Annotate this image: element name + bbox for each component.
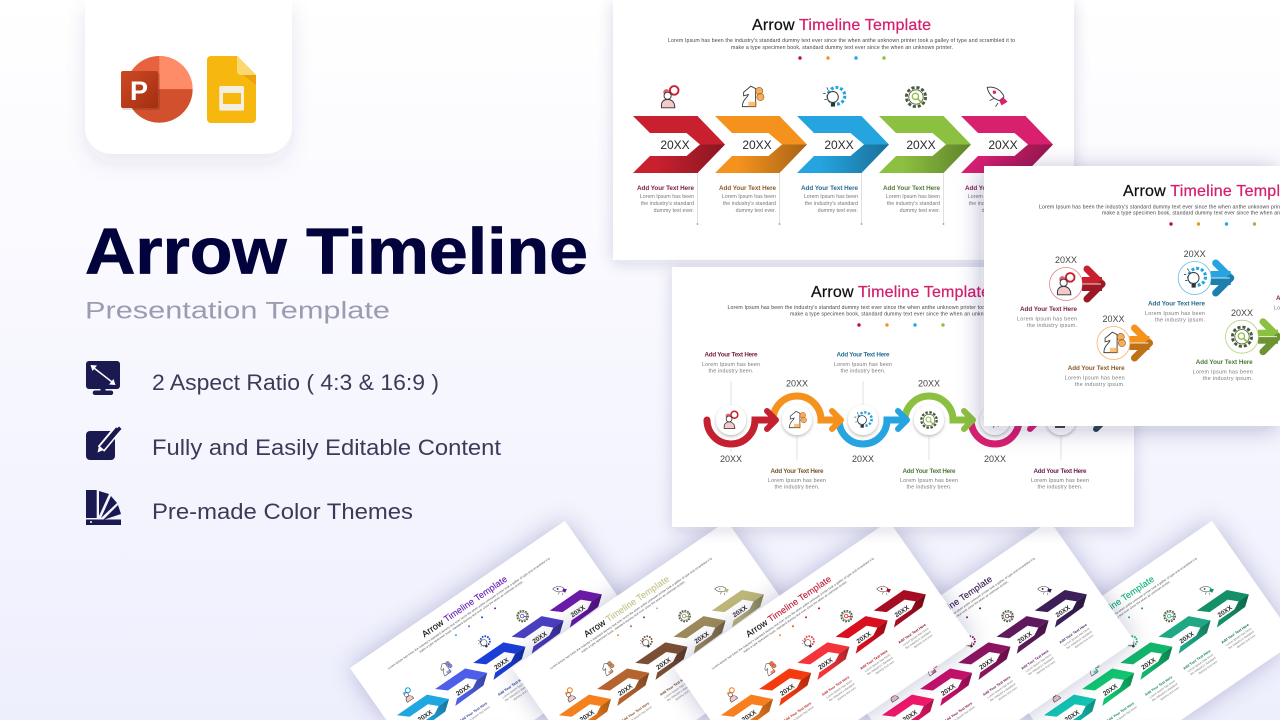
step 3: Add Your Text Here bbox=[801, 185, 858, 192]
step 2: 20XX bbox=[455, 683, 473, 698]
slide: arrow circles bbox=[984, 166, 1280, 426]
step 2: the industry's standard bbox=[723, 201, 776, 207]
step 4 bbox=[502, 594, 569, 658]
slide: earth theme: Lorem Ipsum has been the industry's standard dummy text ever since the when anthe unknown printer took a galley of type and scrambled it to bbox=[549, 556, 713, 670]
step 2 bbox=[910, 646, 990, 720]
step 3: dummy text ever. bbox=[818, 208, 858, 214]
step 3 bbox=[1111, 620, 1195, 708]
step 5: 20XX bbox=[570, 604, 587, 619]
step 1 bbox=[711, 672, 778, 720]
step 3: 20XX bbox=[1184, 249, 1206, 259]
step 3: the industry ipsum. bbox=[1155, 318, 1205, 324]
step 2 bbox=[587, 646, 667, 720]
step 4: Lorem Ipsum has been bbox=[900, 478, 958, 484]
step 3: Add Your Text Here bbox=[836, 352, 890, 358]
step 3: 20XX bbox=[1140, 656, 1158, 672]
step 3: Lorem Ipsum has been bbox=[825, 679, 853, 699]
slide: magenta theme: Arrow Timeline Template bbox=[905, 574, 994, 639]
slide: green theme bbox=[997, 521, 1280, 720]
slide intro text bbox=[1039, 204, 1280, 216]
step 4: Lorem Ipsum has been bbox=[1187, 653, 1214, 673]
step 4 bbox=[879, 87, 971, 225]
step 3 bbox=[626, 620, 710, 708]
slide: purple theme: Arrow Timeline Template bbox=[420, 574, 509, 639]
step 4: dummy text ever. bbox=[1198, 659, 1219, 675]
step 1: the industry ipsum. bbox=[1027, 323, 1077, 329]
step 4: 20XX bbox=[1016, 630, 1034, 645]
step 4 bbox=[900, 378, 973, 490]
step 4: the industry's standard bbox=[866, 656, 894, 676]
step 5 bbox=[1187, 568, 1271, 656]
step 2 bbox=[1065, 314, 1150, 388]
step 4: the industry been. bbox=[906, 484, 952, 490]
step 4: 20XX bbox=[693, 630, 711, 645]
slide: purple theme bbox=[350, 521, 649, 720]
step 1: Lorem Ipsum has been bbox=[640, 194, 694, 200]
step 1: Add Your Text Here bbox=[704, 352, 758, 358]
step 2 bbox=[715, 86, 807, 225]
step 5: Lorem Ipsum has been bbox=[1225, 626, 1253, 647]
step 5 bbox=[864, 568, 948, 656]
step 5: Add Your Text Here bbox=[1059, 623, 1088, 645]
step 4: Lorem Ipsum has been bbox=[864, 653, 891, 673]
title: Arrow Timeline bbox=[85, 214, 588, 288]
step 3: Lorem Ipsum has been bbox=[663, 679, 691, 699]
icon: color fan bbox=[86, 490, 121, 525]
step 5: 20XX bbox=[988, 138, 1018, 152]
step 2: 20XX bbox=[1102, 683, 1120, 698]
step 2: 20XX bbox=[617, 683, 635, 698]
step 1: 20XX bbox=[660, 138, 690, 152]
slide: red theme: Lorem Ipsum has been the industry's standard dummy text ever since the when anthe unknown printer took a galley of type and scrambled it to bbox=[711, 556, 875, 670]
step 3: the industry's standard bbox=[666, 682, 693, 702]
slide: earth theme: Arrow Timeline Template bbox=[582, 574, 671, 639]
step 6: Lorem Ipsum has been bbox=[1031, 478, 1089, 484]
text: themes: Pre-made Color Themes bbox=[152, 499, 413, 524]
step 5: dummy text ever. bbox=[982, 208, 1022, 214]
step 3: the industry's standard bbox=[1151, 682, 1178, 702]
step 3: dummy text ever. bbox=[512, 685, 534, 701]
step 3: Lorem Ipsum has been bbox=[834, 362, 892, 368]
step 1 bbox=[633, 86, 725, 225]
step 5: the industry's standard bbox=[969, 201, 1022, 207]
step 2: 20XX bbox=[940, 683, 958, 698]
step 1: the industry been. bbox=[708, 368, 754, 374]
slide intro text: Lorem Ipsum has been the industry's standard dummy text ever since the when anthe unknown printer took a galley of type and scrambled it to bbox=[668, 38, 1015, 44]
step 3: the industry's standard bbox=[828, 682, 855, 702]
step 3: Lorem Ipsum has been bbox=[804, 194, 858, 200]
step 2 bbox=[425, 646, 505, 720]
step 2: dummy text ever. bbox=[736, 208, 776, 214]
step 3 bbox=[949, 620, 1033, 708]
step 3: the industry been. bbox=[840, 368, 886, 374]
step 3: 20XX bbox=[978, 656, 996, 672]
step 5: Add Your Text Here bbox=[898, 623, 927, 645]
step 2: Add Your Text Here bbox=[1068, 365, 1125, 372]
step 4: the industry ipsum. bbox=[1203, 376, 1253, 382]
slide: magenta theme bbox=[835, 521, 1134, 720]
step 6: Add Your Text Here bbox=[1034, 468, 1087, 475]
step 2: Add Your Text Here bbox=[719, 185, 776, 192]
step 5 bbox=[971, 405, 1039, 464]
step 3: the industry's standard bbox=[805, 201, 858, 207]
step 4: Lorem Ipsum has been bbox=[1025, 653, 1052, 673]
step 5: dummy text ever. bbox=[913, 633, 934, 649]
slide intro text: Lorem Ipsum has been the industry's standard dummy text ever since the when anthe unknown printer took a galley of type and scrambled it to bbox=[728, 305, 1075, 311]
step 4: 20XX bbox=[1178, 630, 1196, 645]
step 4: 20XX bbox=[918, 378, 940, 388]
step 3 bbox=[788, 620, 872, 708]
step 4: dummy text ever. bbox=[1036, 659, 1057, 675]
step 2: 20XX bbox=[786, 378, 808, 388]
step 3: Add Your Text Here bbox=[1148, 300, 1205, 308]
step 4: Lorem Ipsum has been bbox=[886, 194, 940, 200]
slide: purple theme: Lorem Ipsum has been the industry's standard dummy text ever since the when anthe unknown printer took a galley of type and scrambled it to bbox=[387, 556, 551, 670]
step 1 bbox=[872, 672, 939, 720]
step 5 bbox=[540, 568, 607, 631]
step 5: the industry's standard bbox=[905, 630, 932, 650]
slide: green theme: Lorem Ipsum has been the industry's standard dummy text ever since the when anthe unknown printer took a galley of type and scrambled it to bbox=[1034, 556, 1198, 670]
slide: serpentine arrows bbox=[672, 267, 1134, 527]
step 5: 20XX bbox=[984, 454, 1006, 464]
step 2: Lorem Ipsum has been bbox=[1065, 376, 1125, 382]
step 3: dummy text ever. bbox=[997, 685, 1019, 701]
step 3: 20XX bbox=[493, 656, 511, 672]
step 2: Lorem Ipsum has been bbox=[768, 478, 826, 484]
step 1: Add Your Text Here bbox=[637, 185, 694, 192]
slide: purple theme: make a type specimen book, standard dummy text ever since the when an unknown printer. bbox=[418, 579, 524, 654]
step 4: the industry's standard bbox=[1189, 656, 1217, 676]
slide intro text: make a type specimen book, standard dummy text ever since the when an unknown printer. bbox=[790, 312, 1012, 318]
slide heading: Arrow Timeline Template bbox=[752, 17, 931, 34]
slide intro text: make a type specimen book, standard dummy text ever since the when an unknown printer. bbox=[731, 45, 953, 51]
step 4: Add Your Text Here bbox=[1020, 649, 1050, 671]
slide: magenta theme: Lorem Ipsum has been the industry's standard dummy text ever since the when anthe unknown printer took a galley of type and scrambled it to bbox=[872, 556, 1036, 670]
step 2: 20XX bbox=[779, 683, 797, 698]
step 6: the industry been. bbox=[1038, 484, 1082, 490]
step 6 bbox=[1031, 396, 1105, 490]
step 4: dummy text ever. bbox=[900, 208, 940, 214]
step 1: Add Your Text Here bbox=[1020, 306, 1077, 313]
step 1: Lorem Ipsum has been bbox=[702, 362, 760, 368]
step 3: Lorem Ipsum has been bbox=[986, 679, 1014, 699]
step 5: 20XX bbox=[1217, 604, 1234, 619]
step 2: the industry ipsum. bbox=[1075, 382, 1125, 388]
step 3: the industry's standard bbox=[989, 682, 1016, 702]
step 4: Add Your Text Here bbox=[859, 649, 889, 671]
step 2: Add Your Text Here bbox=[770, 468, 824, 475]
step 5: 20XX bbox=[894, 604, 911, 619]
step 4 bbox=[826, 594, 910, 682]
step 3: 20XX bbox=[852, 454, 874, 464]
step 5 bbox=[702, 568, 769, 631]
step 1: 20XX bbox=[720, 454, 742, 464]
step 4: 20XX bbox=[1231, 308, 1253, 318]
step 4: 20XX bbox=[855, 630, 873, 645]
step 5 bbox=[961, 87, 1053, 214]
step 1: Lorem Ipsum has been bbox=[1017, 316, 1077, 322]
step 4: dummy text ever. bbox=[875, 659, 896, 675]
step 3: 20XX bbox=[824, 138, 854, 152]
step 5: Lo bbox=[1274, 306, 1280, 312]
step 3: Lorem Ipsum has been bbox=[1148, 679, 1176, 699]
feature: aspect ratio bbox=[86, 361, 439, 395]
feature: editable bbox=[86, 428, 501, 460]
step 3: dummy text ever. bbox=[836, 685, 858, 701]
step 5 bbox=[1025, 568, 1109, 656]
slide intro text bbox=[728, 305, 1075, 318]
text: editable: Fully and Easily Editable Content bbox=[152, 435, 501, 460]
legend dots bbox=[1169, 222, 1256, 226]
step 3: dummy text ever. bbox=[1159, 685, 1181, 701]
step 2 bbox=[768, 378, 841, 490]
slide: earth theme bbox=[512, 521, 811, 720]
step 3: Add Your Text Here bbox=[821, 675, 850, 697]
step 1 bbox=[549, 672, 616, 720]
step 3: 20XX bbox=[817, 656, 835, 672]
step 2: 20XX bbox=[1102, 314, 1125, 324]
slide intro text: make a type specimen book, standard dummy text ever since the when an bbox=[1102, 210, 1280, 216]
slide: magenta theme: make a type specimen book, standard dummy text ever since the when an unknown printer. bbox=[903, 579, 1009, 654]
legend dots bbox=[857, 323, 945, 327]
step 4 bbox=[1149, 594, 1233, 682]
icon: monitor bbox=[86, 361, 120, 395]
step 4 bbox=[987, 594, 1071, 682]
step 4: the industry's standard bbox=[1027, 656, 1055, 676]
step 3: 20XX bbox=[655, 656, 673, 672]
step 1 bbox=[387, 672, 454, 720]
step 5 bbox=[1274, 295, 1280, 312]
step 4 bbox=[664, 594, 731, 658]
step 5: the industry's standard bbox=[1066, 630, 1093, 650]
step 4: 20XX bbox=[906, 138, 936, 152]
slide: red theme bbox=[674, 521, 973, 720]
legend dots bbox=[798, 56, 886, 60]
step 4: Add Your Text Here bbox=[902, 468, 956, 475]
step 3: dummy text ever. bbox=[674, 685, 696, 701]
icon: edit bbox=[86, 428, 120, 460]
step 3 bbox=[1145, 249, 1231, 324]
step 2: 20XX bbox=[742, 138, 772, 152]
step 4 bbox=[1193, 308, 1278, 382]
step 5: 20XX bbox=[732, 604, 749, 619]
step 5: Lorem Ipsum has been bbox=[1063, 626, 1091, 647]
feature: themes bbox=[86, 490, 413, 525]
step 1: 20XX bbox=[1055, 255, 1077, 265]
step 1 bbox=[1017, 255, 1102, 329]
step 4: Add Your Text Here bbox=[883, 185, 940, 192]
step 1: dummy text ever. bbox=[654, 208, 694, 214]
app icon card bbox=[85, 0, 292, 154]
slide: earth theme: make a type specimen book, standard dummy text ever since the when an unknown printer. bbox=[580, 579, 686, 654]
step 1 bbox=[1034, 672, 1101, 720]
text: aspect ratio: 2 Aspect Ratio ( 4:3 & 16:9 ) bbox=[152, 370, 439, 395]
step 3 bbox=[797, 87, 889, 225]
icon: Google Slides bbox=[207, 56, 256, 123]
step 3: Add Your Text Here bbox=[497, 675, 526, 697]
slide: red theme: make a type specimen book, standard dummy text ever since the when an unknown printer. bbox=[742, 579, 848, 654]
step 5: dummy text ever. bbox=[1074, 633, 1095, 649]
step 3: Add Your Text Here bbox=[1144, 675, 1173, 697]
step 4: 20XX bbox=[531, 630, 549, 645]
step 3: Lorem Ipsum has been bbox=[501, 679, 529, 699]
step 3: Add Your Text Here bbox=[982, 675, 1011, 697]
slide intro text: Lorem Ipsum has been the industry's standard dummy text ever since the when anthe unknown prin bbox=[1039, 204, 1280, 210]
step 5: dummy text ever. bbox=[1236, 633, 1257, 649]
step 5: Add Your Text Here bbox=[1221, 623, 1250, 645]
step 1 bbox=[702, 352, 776, 464]
step 5: the industry's standard bbox=[1228, 630, 1255, 650]
step 5: Add Your Text Here bbox=[965, 185, 1022, 192]
slide heading: Arrow Timeline Template bbox=[811, 284, 990, 301]
step 2: Lorem Ipsum has been bbox=[722, 194, 776, 200]
step 5: Lorem Ipsum has been bbox=[968, 194, 1022, 200]
slide: red theme: Arrow Timeline Template bbox=[744, 574, 833, 639]
slide: chevron arrows bbox=[613, 0, 1074, 260]
step 4: Add Your Text Here bbox=[1182, 649, 1212, 671]
step 3: the industry's standard bbox=[504, 682, 531, 702]
step 1: the industry's standard bbox=[641, 201, 694, 207]
step 2 bbox=[1072, 646, 1152, 720]
icon: PowerPoint: P bbox=[130, 76, 148, 106]
step 3 bbox=[834, 352, 907, 464]
subtitle: Presentation Template bbox=[85, 298, 390, 324]
step 3 bbox=[464, 620, 548, 708]
step 2 bbox=[749, 646, 829, 720]
step 5: 20XX bbox=[1055, 604, 1072, 619]
step 4: the industry's standard bbox=[887, 201, 940, 207]
slide: green theme: Arrow Timeline Template bbox=[1067, 574, 1156, 639]
slide heading: Arrow Timeline Templ bbox=[1123, 183, 1280, 200]
step 4: Add Your Text Here bbox=[1196, 359, 1253, 366]
slide intro text bbox=[668, 38, 1015, 51]
step 3: Add Your Text Here bbox=[659, 675, 688, 697]
step 2: the industry been. bbox=[774, 484, 820, 490]
step 3: Lorem Ipsum has been bbox=[1145, 311, 1205, 317]
step 4: Lorem Ipsum has been bbox=[1193, 370, 1253, 376]
step 5: Lorem Ipsum has been bbox=[902, 626, 930, 647]
slide: green theme: make a type specimen book, standard dummy text ever since the when an unknown printer. bbox=[1065, 579, 1171, 654]
icon: PowerPoint bbox=[121, 56, 193, 123]
